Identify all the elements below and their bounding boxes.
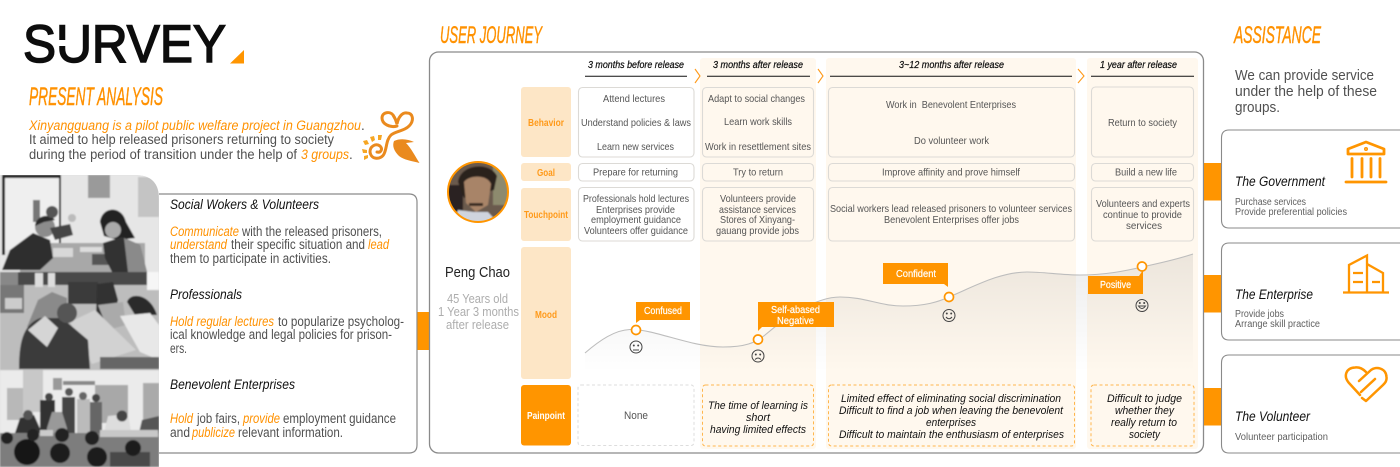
goal row: Build a new life [1115,166,1177,178]
row label: painpoint: Painpoint [527,411,566,422]
assistance intro text [1235,68,1377,116]
text block: benevolent enterprises [170,377,396,440]
photo: social workers [0,175,159,292]
connector: journey to enterprise [1204,275,1221,312]
connector: left panel to journey [418,312,430,350]
text block: social workers and volunteers: them to participate in activities. [170,251,331,266]
mood point: confident: Confident [896,269,936,280]
mood point: self-abased negative: Self-abased [771,305,820,316]
touchpoint row: Enterprises provide [596,204,675,216]
icon: government building [1346,142,1386,182]
text block: benevolent enterprises: job fairs, [196,411,240,426]
intro text: during the period of transition under the help of [29,147,297,162]
mood point: confused [630,302,690,353]
painpoint row: whether they [1115,405,1175,417]
panel: present analysis groups [159,194,417,453]
touchpoint row: gauang provide jobs [716,225,799,237]
touchpoint row: continue to provide [1103,209,1182,221]
touchpoint row: services [1126,220,1162,232]
persona: Peng Chao: Peng Chao [445,265,510,281]
panel: user journey [430,52,1204,453]
behavior row: Work in resettlement sites [705,141,811,153]
icon: volunteer heart [1346,367,1387,401]
text block: social workers and volunteers: Social Wokers & Volunteers [170,197,319,212]
text block: benevolent enterprises: Hold [170,411,193,426]
heading: assistance: ASSISTANCE [1233,22,1322,49]
text block: professionals: ical knowledge and legal policies for prison- [170,327,392,342]
mood point: positive [1088,262,1148,312]
behavior row [578,87,1194,157]
painpoint row: Difficult to judge [1107,393,1182,405]
row label: goal [521,163,571,181]
painpoint row: Difficult to maintain the enthusiasm of enterprises [839,429,1064,441]
text block: benevolent enterprises: and [170,425,190,440]
logo: SURVEY: SURVEY [23,15,226,74]
touchpoint row: Volunteers provide [720,193,796,205]
row label: touchpoint: Touchpoint [524,210,569,221]
card: the volunteer: The Volunteer [1235,409,1310,424]
connector: journey to government [1204,163,1221,200]
intro text: . [349,147,353,162]
column tint: 3 months after [700,58,816,449]
behavior row: Learn new services [597,141,674,153]
touchpoint row: Professionals hold lectures [583,193,689,205]
column headers: 1 year after release [1100,59,1177,71]
goal row: Try to return [733,166,783,178]
text block: professionals: to popularize psycholog- [278,314,404,329]
mood point: self-abased negative [752,302,834,362]
text block: social workers and volunteers: understand [170,237,227,252]
mood point: confused: Confused [644,306,682,317]
column headers: 3~12 months after release [899,59,1004,71]
intro text: It aimed to help released prisoners returning to society [29,132,334,147]
painpoint row: Limited effect of eliminating social discrimination [841,393,1061,405]
row label: behavior [521,87,571,157]
text block: benevolent enterprises: publicize [191,425,235,440]
behavior row: Attend lectures [603,93,665,105]
assistance intro text: groups. [1235,100,1280,116]
persona: Peng Chao [438,161,519,332]
card: the enterprise: Arrange skill practice [1235,319,1320,330]
touchpoint row: assistance services [719,204,796,216]
row label: mood [521,247,571,379]
goal row [578,164,1194,181]
card: the volunteer: Volunteer participation [1235,432,1328,443]
icon: Xinyangguang heart logo [362,113,420,163]
painpoint row [578,385,1194,446]
text block: social workers and volunteers: their specific situation and [231,237,365,252]
text block: social workers and volunteers: lead [368,237,389,252]
goal row: Improve affinity and prove himself [882,166,1020,178]
mood chart [585,254,1193,378]
painpoint row: Difficult to find a job when leaving the benevolent [839,405,1064,417]
row label: behavior: Behavior [528,118,564,129]
behavior row: Understand policies & laws [581,117,691,129]
mood point: confident [883,263,955,322]
text block: benevolent enterprises: Benevolent Enterprises [170,377,295,392]
card: the government: The Government [1235,174,1326,189]
heading: present analysis: PRESENT ANALYSIS [29,83,163,111]
card: the government [1222,130,1400,228]
persona: Peng Chao: 1 Year 3 months [438,305,519,319]
mood point: positive: Positive [1100,280,1131,291]
card: the enterprise: Provide jobs [1235,309,1284,320]
touchpoint row: Stores of Xinyang- [720,214,795,226]
row label: touchpoint [521,188,571,241]
touchpoint row [578,188,1194,241]
text block: benevolent enterprises: provide [242,411,280,426]
painpoint row: having limited effects [710,424,806,436]
intro text [28,118,365,162]
column headers [585,59,1194,76]
text block: social workers and volunteers [170,197,389,266]
behavior row: Learn work skills [724,116,792,128]
column headers: 3 months before release [588,59,684,71]
touchpoint row: Volunteers and experts [1096,198,1190,210]
text block: professionals [170,287,404,356]
persona: Peng Chao: 45 Years old [447,292,508,306]
assistance intro text: We can provide service [1235,68,1374,84]
card: the volunteer [1222,355,1400,453]
painpoint row: None [624,410,648,422]
row label: painpoint [521,385,571,446]
text block: professionals: Hold regular lectures [170,314,274,329]
intro text: Xinyangguang is a pilot public welfare project in Guangzhou [28,118,361,133]
text block: professionals: ers. [170,341,187,356]
touchpoint row: Volunteers offer guidance [584,225,688,237]
text block: benevolent enterprises: relevant information. [238,425,343,440]
column tint: 3 to 12 months [826,58,1076,449]
touchpoint row: Benevolent Enterprises offer jobs [884,214,1019,226]
card: the government: Provide preferential policies [1235,207,1347,218]
text block: social workers and volunteers: with the released prisoners, [241,224,382,239]
icon: enterprise buildings [1343,256,1389,292]
text block: social workers and volunteers: Communicate [170,224,239,239]
touchpoint row: Social workers lead released prisoners to volunteer services [830,203,1072,215]
painpoint row: short [746,412,771,424]
column headers: 3 months after release [713,59,803,71]
icon: portrait [447,161,509,225]
persona: Peng Chao: after release [446,318,509,332]
row label: goal: Goal [537,168,555,179]
arrows between phases [695,69,1084,83]
painpoint row: society [1129,429,1161,441]
photo: professionals [0,272,159,370]
card: the government: Purchase services [1235,197,1306,208]
intro text: . [361,118,365,133]
text block: professionals: Professionals [170,287,242,302]
painpoint row: The time of learning is [708,400,808,412]
connector: journey to volunteer [1204,388,1221,426]
painpoint row: really return to [1111,417,1177,429]
intro text: 3 groups [301,147,349,162]
painpoint row: enterprises [926,417,976,429]
photo column: three grayscale photos [0,175,159,467]
card: the enterprise: The Enterprise [1235,287,1313,302]
behavior row: Work in Benevolent Enterprises [886,99,1016,111]
behavior row: Do volunteer work [914,135,990,147]
behavior row: Adapt to social changes [708,93,805,105]
column tint: 1 year [1087,58,1198,449]
goal row: Prepare for returning [593,166,678,178]
card: the enterprise [1222,243,1400,340]
text block: benevolent enterprises: employment guidance [283,411,396,426]
heading: user journey: USER JOURNEY [440,22,543,49]
behavior row: Return to society [1108,117,1178,129]
mood point: self-abased negative: Negative [777,316,814,327]
touchpoint row: employment guidance [591,214,681,226]
assistance intro text: under the help of these [1235,84,1377,100]
photo: enterprises [0,370,159,467]
row label: mood: Mood [535,310,557,321]
